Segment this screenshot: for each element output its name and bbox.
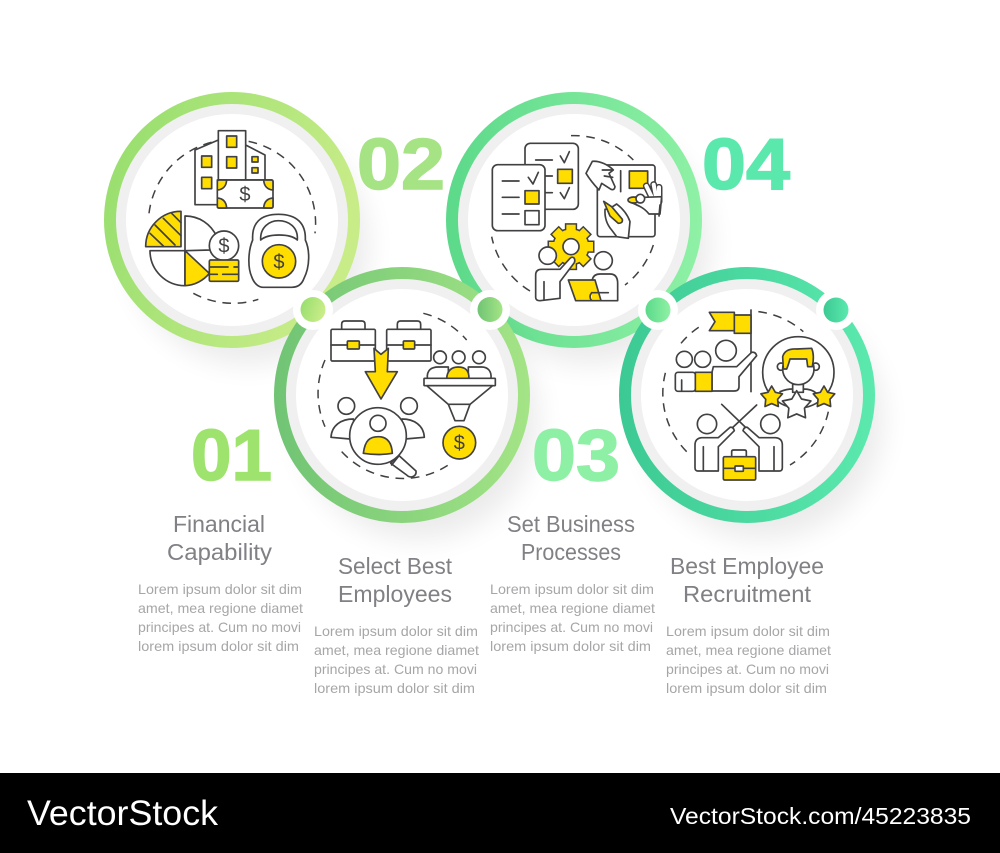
text block: financial capability: lorem ipsum dolor sit dim [138,638,299,654]
lower hand with pen [605,204,630,238]
text block: set business processes: Lorem ipsum dolor sit dim [490,581,654,597]
text block: financial capability: Lorem ipsum dolor sit dim [138,581,302,597]
text block: set business processes [490,511,655,654]
text block: best employee recruitment [666,553,831,696]
panel: circle 04 best employee recruitment [619,267,883,539]
text block: select best employees: Employees [338,581,452,607]
icon: finance building, pie chart, kettlebell: $ [218,236,230,258]
icon: briefcases, arrow, funnel, magnifier [318,313,495,478]
text block: financial capability: Financial [173,511,265,537]
connector dot 3 [638,290,678,330]
right hand [646,185,659,202]
text block: select best employees [314,553,479,696]
text block: select best employees: Lorem ipsum dolor sit dim [314,623,478,639]
icon: finance building, pie chart, kettlebell: $ [239,184,251,206]
text block: set business processes: Set Business [507,511,635,537]
text block: select best employees: principes at. Cum no movi [314,661,477,677]
left hand [586,161,615,190]
text block: best employee recruitment: Best Employee [670,553,824,579]
text block: financial capability: amet, mea regione diamet [138,600,303,616]
footer image id: VectorStock.com/45223835 [670,803,971,829]
gear outline then fill [549,225,593,269]
connector dot 4 [816,290,856,330]
text block: set business processes: amet, mea regione diamet [490,600,655,616]
text block: set business processes: principes at. Cum no movi [490,619,653,635]
icon: finance building, pie chart, kettlebell: $ [273,251,285,273]
number 04: 04 [702,125,790,205]
footer bar [0,773,1000,853]
text block: best employee recruitment: Lorem ipsum dolor sit dim [666,623,830,639]
icon: team flag, rated employee, handshake [663,310,835,480]
panel: circle 03 set business processes [446,92,710,364]
icon: finance building, pie chart, kettlebell [146,131,316,303]
number 02: 02 [357,125,445,205]
text block: best employee recruitment: principes at. Cum no movi [666,661,829,677]
text block: set business processes: Processes [521,539,621,565]
text block: set business processes: lorem ipsum dolor sit dim [490,638,651,654]
connector dot 1 [293,290,333,330]
text block: select best employees: amet, mea regione diamet [314,642,479,658]
text block: financial capability: principes at. Cum no movi [138,619,301,635]
text block: financial capability [138,511,303,654]
number 03: 03 [532,416,620,496]
text block: best employee recruitment: Recruitment [683,581,812,607]
text block: financial capability: Capability [167,539,273,565]
panel: circle 02 select best employees [274,267,538,539]
footer brand: VectorStock [27,794,219,833]
icon: checklists, board, gear, team [492,136,662,301]
number 01: 01 [191,416,272,496]
text block: best employee recruitment: lorem ipsum dolor sit dim [666,680,827,696]
icon: briefcases, arrow, funnel, magnifier: $ [454,433,465,455]
text block: select best employees: Select Best [338,553,453,579]
text block: select best employees: lorem ipsum dolor sit dim [314,680,475,696]
text block: best employee recruitment: amet, mea regione diamet [666,642,831,658]
panel: circle 01 financial capability [104,92,368,364]
connector dot 2 [470,290,510,330]
